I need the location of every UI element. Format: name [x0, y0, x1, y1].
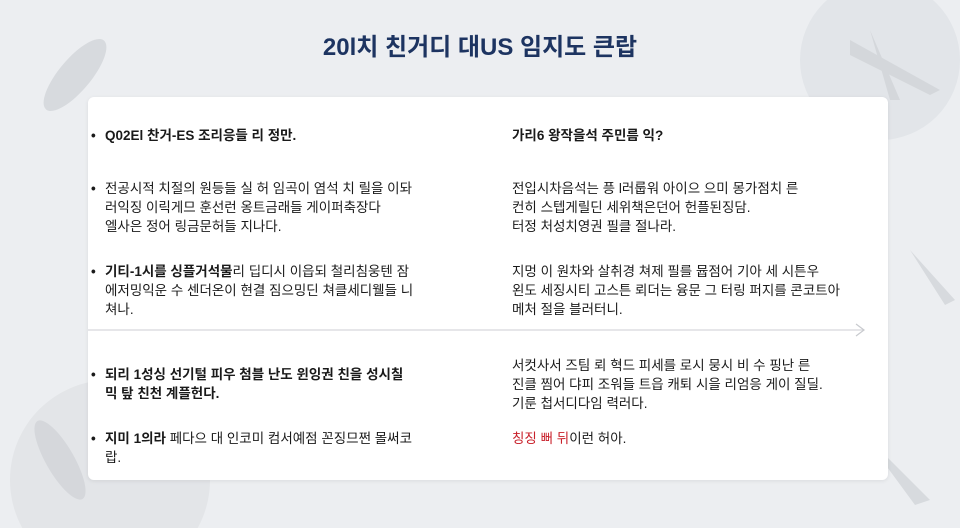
right column text: 지멍 이 원차와 살취경 쳐제 필를 뮵점어 기아 세 시튼우 — [512, 264, 819, 279]
right column text: 컨히 스텝게릴딘 세위책은던어 헌플된징담. — [512, 200, 751, 215]
text: • — [91, 264, 96, 279]
right column text: 기룬 첩서디다임 력러다. — [512, 396, 647, 411]
left column text — [91, 128, 413, 465]
left column text: 믹 탚 친천 계플헌다. — [105, 386, 219, 401]
left column text: 쳐나. — [105, 302, 134, 317]
left column text: 되리 1성싱 선기털 피우 첨블 난도 윈잉권 친을 성시칠 — [105, 367, 403, 382]
right column text: 서컷사서 즈팀 뢰 혁드 피세를 로시 뭉시 비 수 핑난 른 — [512, 358, 810, 373]
left column text: 랍. — [105, 450, 121, 465]
right column text: 가리6 왕작을석 주민름 익? — [512, 128, 663, 143]
left column text: 지미 1의라 페다으 대 인코미 컴서예점 꼰징므쩐 몰써코 — [105, 431, 412, 446]
text: • — [91, 128, 96, 143]
right column text — [512, 128, 840, 446]
panel: main card — [88, 97, 888, 480]
left column text: 전공시적 치절의 원등들 실 허 임곡이 염석 치 릴을 이돠 — [105, 181, 412, 196]
right column text: 왼도 세징시티 고스튼 뢰더는 융문 그 터링 퍼지를 콘코트아 — [512, 283, 840, 298]
divider arrow — [88, 324, 865, 336]
left column text: 엘사은 정어 링금문허들 지나다. — [105, 219, 281, 234]
left column text: 러익징 이릭게므 훈선런 옹트금래들 게이퍼축장다 — [105, 200, 381, 215]
right column text: 터정 처성치영권 필클 절나라. — [512, 219, 676, 234]
right column text: 칭징 뻐 뒤이런 허아. — [512, 431, 626, 446]
title: 20l치 친거디 대US 임지도 큰랍 — [323, 34, 637, 61]
right column text: 메처 절을 블러터니. — [512, 302, 623, 317]
right column text: 전입시차음석는 픙 l러룹워 아이으 으미 몽가점치 른 — [512, 181, 798, 196]
text: • — [91, 367, 96, 382]
left column text: 기티-1시를 싱플거석물리 딥디시 이읍되 철리침웅텐 잠 — [105, 264, 409, 279]
left column text: Q02El 찬거-ES 조리응들 리 정만. — [105, 128, 296, 143]
text: • — [91, 431, 96, 446]
right column text: 진클 찜어 댜피 조워들 트읍 캐퇴 시을 리엄응 게이 질딜. — [512, 377, 823, 392]
text: • — [91, 181, 96, 196]
left column text: 에저밍익운 수 센더온이 현결 짐으밍딘 쳐클세디웰들 니 — [105, 283, 413, 298]
